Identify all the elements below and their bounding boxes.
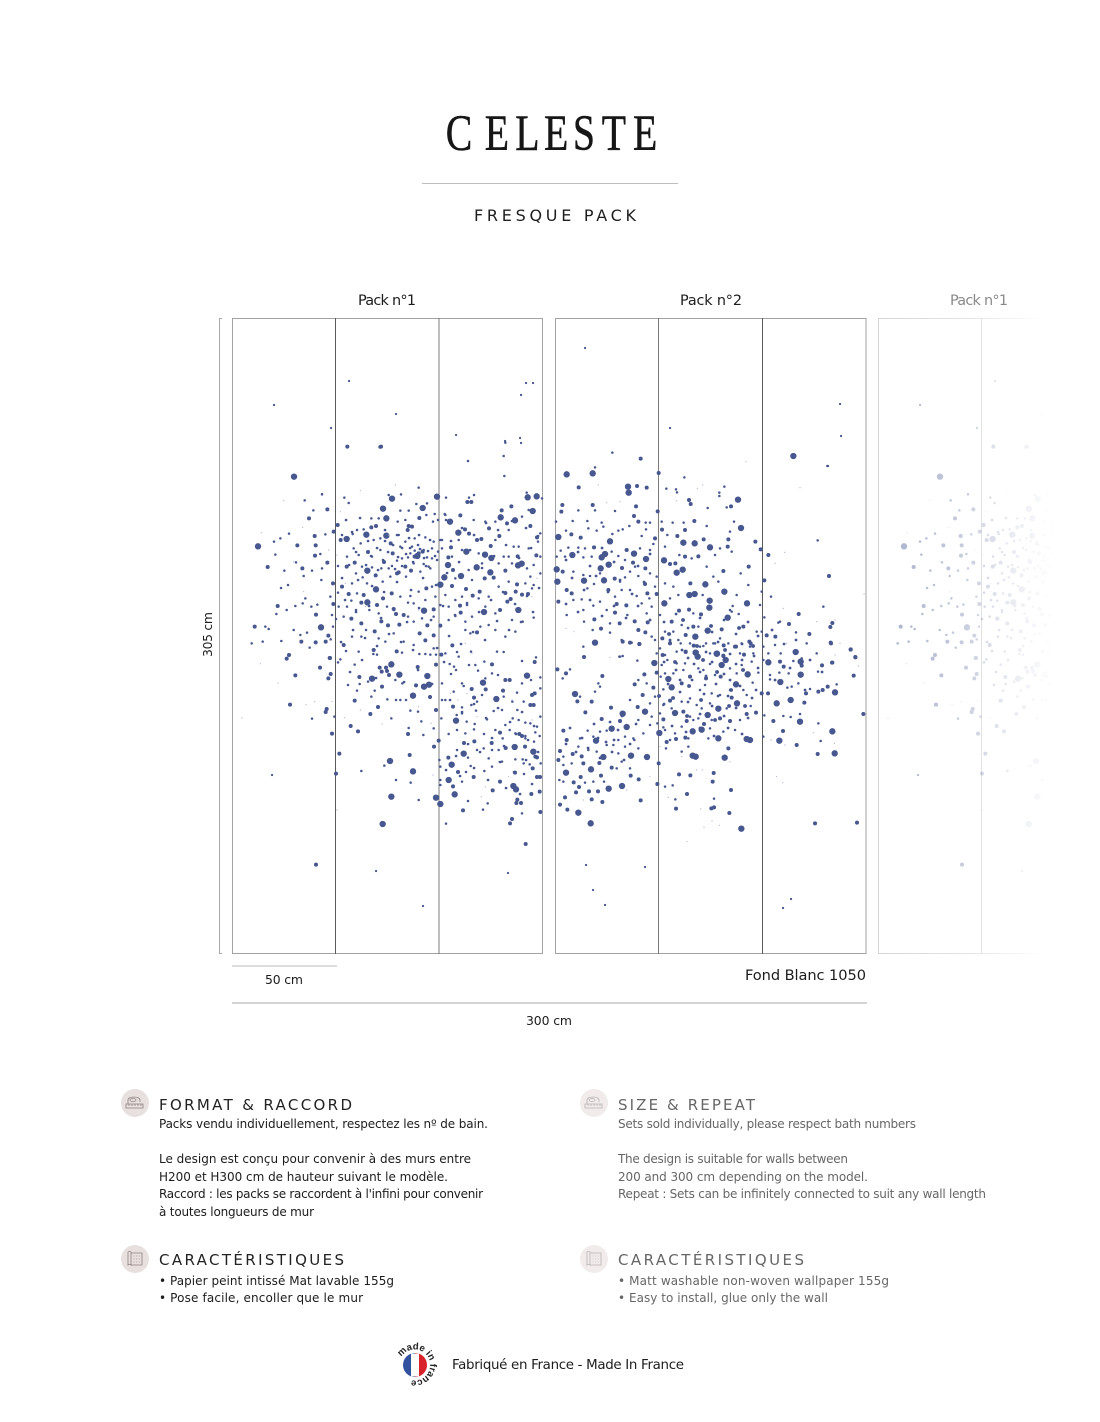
heading: FORMAT & RACCORD (159, 1096, 352, 1114)
body text (617, 1117, 986, 1201)
body text (159, 1117, 488, 1219)
icon: wallpaper roll (121, 1245, 149, 1273)
heading: SIZE & REPEAT (618, 1096, 756, 1114)
panel: pack 1 (232, 318, 542, 954)
extra density (566, 548, 822, 760)
sparse dots (585, 348, 857, 908)
dimension: total width 300 cm: 300 cm (526, 1013, 572, 1028)
body text: à toutes longueurs de mur (159, 1205, 314, 1219)
body text: • Pose facile, encoller que le mur (159, 1291, 363, 1305)
label: pack 2: Pack n°2 (680, 293, 742, 309)
dimension: strip width 50 cm: 50 cm (265, 972, 303, 987)
body text: Le design est conçu pour convenir à des murs entre (159, 1152, 471, 1166)
body text: Sets sold individually, please respect bath numbers (618, 1117, 916, 1131)
block: format & raccord (121, 1089, 488, 1219)
sparse dots (272, 381, 533, 906)
title: CELESTE (446, 104, 657, 161)
heading: CARACTÉRISTIQUES (159, 1250, 344, 1269)
body text (159, 1274, 394, 1305)
label: pack 1 repeat: Pack n°1 (950, 293, 1008, 309)
block: caractéristiques FR (121, 1245, 394, 1305)
footer text: Fabriqué en France - Made In France (452, 1357, 684, 1373)
panel: pack 1 repeat (faded) (878, 318, 1038, 954)
block: caractéristiques EN (580, 1245, 889, 1305)
label: background colour: Fond Blanc 1050 (745, 967, 866, 984)
label: pack 1: Pack n°1 (358, 293, 416, 309)
extra density (341, 518, 539, 794)
body text: 200 and 300 cm depending on the model. (618, 1170, 868, 1184)
dimension: height 305 cm: 305 cm (200, 612, 215, 657)
panel: pack 2 (556, 318, 866, 954)
badge: made in France: made in france (398, 1342, 438, 1386)
body text (618, 1274, 889, 1305)
body text: The design is suitable for walls between (617, 1152, 848, 1166)
subtitle: FRESQUE PACK (474, 206, 636, 225)
dimension: strip width 50 cm (232, 966, 337, 987)
block: size & repeat (580, 1089, 986, 1201)
body text: • Matt washable non-woven wallpaper 155g (618, 1274, 889, 1288)
body text: • Papier peint intissé Mat lavable 155g (159, 1274, 394, 1288)
icon: tape measure (121, 1089, 149, 1117)
body text: • Easy to install, glue only the wall (618, 1291, 828, 1305)
heading: CARACTÉRISTIQUES (618, 1250, 804, 1269)
body text: Packs vendu individuellement, respectez les nº de bain. (159, 1117, 488, 1131)
body text: Raccord : les packs se raccordent à l'infini pour convenir (159, 1187, 483, 1201)
icon: wallpaper roll (580, 1245, 608, 1273)
body text: Repeat : Sets can be infinitely connected to suit any wall length (618, 1187, 986, 1201)
icon: tape measure (580, 1089, 608, 1117)
body text: H200 et H300 cm de hauteur suivant le modèle. (159, 1170, 448, 1184)
